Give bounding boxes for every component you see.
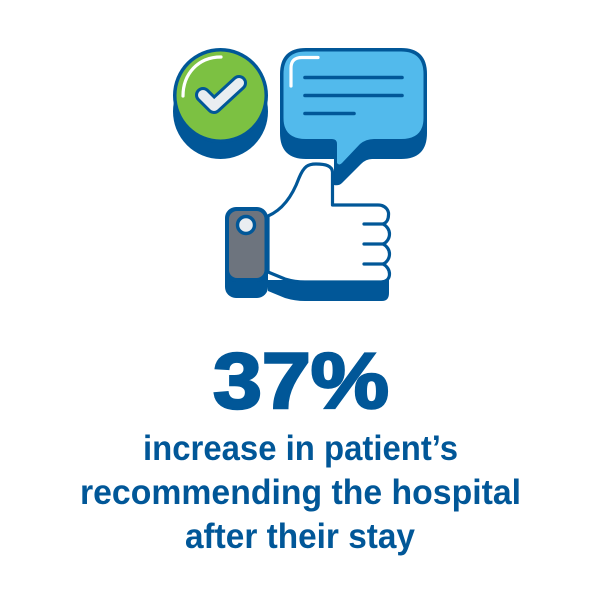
headline stat: 37%: [213, 336, 389, 425]
description text: recommending the hospital: [80, 473, 521, 512]
icon: speech bubble: [280, 48, 427, 185]
description text: [80, 429, 521, 556]
icon: thumbs up hand: [225, 164, 390, 301]
description text: after their stay: [185, 517, 415, 556]
description text: increase in patient’s: [143, 429, 458, 468]
icon: green check badge: [173, 48, 268, 159]
